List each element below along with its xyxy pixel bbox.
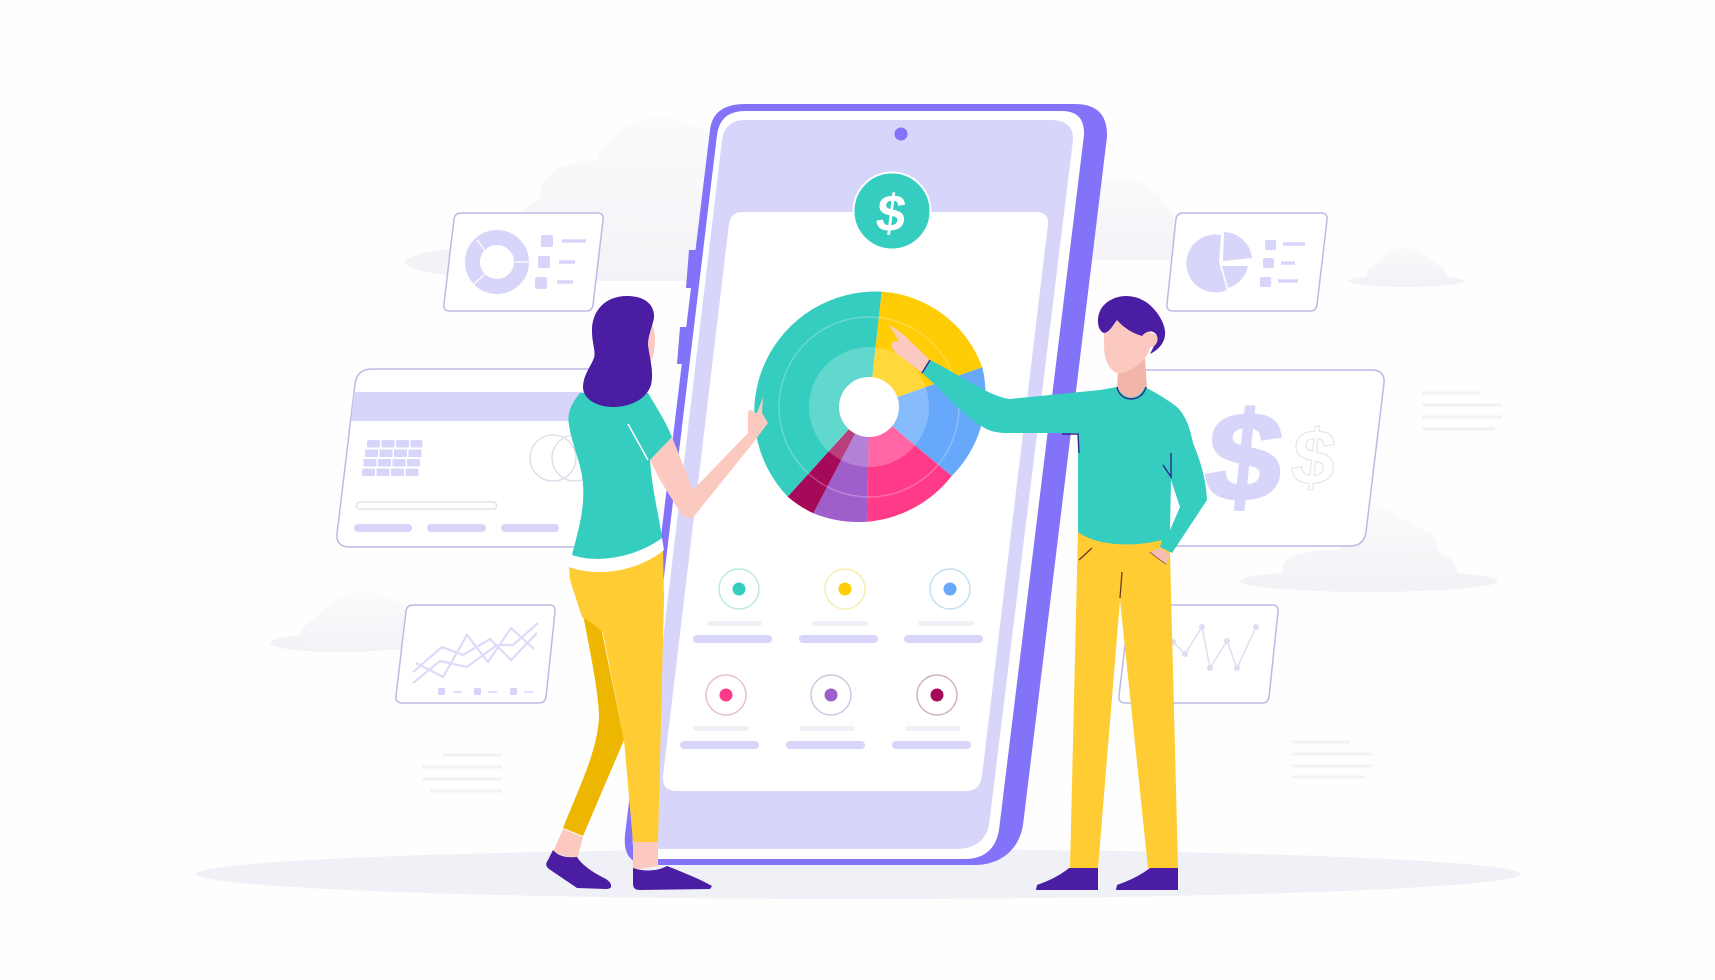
legend: pie chart: [1260, 240, 1305, 287]
panel: dollar signs card: [1130, 370, 1384, 546]
cloud: large left behind phone: [405, 116, 760, 281]
card stripe: [351, 392, 600, 421]
slice: blue: [869, 367, 986, 476]
woman ankles: [553, 829, 658, 870]
panel: donut chart card: [444, 213, 603, 311]
woman hair: [583, 296, 654, 407]
legend item: maroon: [892, 675, 971, 749]
card number field: [356, 502, 496, 509]
outer thin ring: [779, 317, 959, 497]
cloud: lower left: [270, 592, 430, 652]
phone body: [625, 104, 1107, 865]
ground shadow: [196, 849, 1520, 899]
man neck: [1117, 358, 1147, 398]
app card: [663, 212, 1048, 791]
man trousers: [1070, 530, 1178, 868]
line chart: left: [413, 623, 538, 683]
pie chart: sunburst: [754, 292, 986, 522]
man sweater: [922, 360, 1207, 553]
phone bezel: [633, 111, 1084, 859]
icon: dollar badge: $: [873, 185, 909, 243]
placeholder text lines: upper right: [1422, 393, 1502, 429]
woman arm and hand: [650, 397, 768, 518]
legend item: teal: [693, 569, 772, 643]
icon: card chip: [362, 440, 422, 476]
placeholder text lines: lower right: [1292, 742, 1372, 777]
icon: dollar badge: [854, 172, 930, 250]
panel: left line chart card: [396, 605, 555, 703]
cloud: top right small: [1348, 247, 1464, 287]
slice: yellow: [869, 292, 982, 407]
phone camera: [894, 128, 908, 140]
card detail bars: [354, 524, 559, 532]
legend item: yellow: [799, 569, 878, 643]
slice: purple: [813, 407, 869, 522]
legend: left line chart: [438, 688, 533, 695]
center hole: [839, 377, 899, 437]
woman waist gap: [569, 538, 664, 572]
woman sleeve seam: [628, 424, 648, 460]
cloud: right behind phone: [1090, 177, 1182, 260]
slice: teal: [754, 292, 882, 497]
man shoes: [1036, 868, 1178, 890]
line chart: right: [1150, 624, 1259, 671]
woman back leg: [563, 610, 624, 836]
woman front leg and hips: [569, 549, 664, 842]
woman shoes: [546, 850, 712, 890]
legend item: pink: [680, 675, 759, 749]
phone: [625, 104, 1107, 865]
man arm gap: [1170, 480, 1180, 530]
man hand in pocket: [1150, 548, 1170, 564]
panel: right line chart card: [1119, 605, 1278, 703]
man: [889, 296, 1207, 890]
icon: card brand circles: [530, 435, 598, 481]
cloud: lower right: [1240, 507, 1498, 592]
icon: donut chart: [472, 238, 530, 286]
man ear: [1144, 333, 1158, 347]
panel: pie chart card: [1167, 213, 1327, 311]
slice: maroon: [788, 407, 869, 513]
man sweater details: [922, 360, 1171, 477]
man pointing hand: [889, 325, 930, 373]
man hair: [1098, 296, 1165, 354]
icon: outlined dollar sign: $: [1288, 413, 1340, 501]
man face: [1104, 318, 1150, 374]
legend item: purple: [786, 675, 865, 749]
woman face: [645, 320, 655, 362]
phone side buttons: [677, 250, 699, 364]
slice: pink: [867, 407, 952, 522]
woman shirt: [568, 393, 672, 559]
placeholder text lines: lower left: [422, 755, 502, 791]
man trouser seams: [1079, 548, 1166, 598]
legend item: blue: [904, 569, 983, 643]
woman: [546, 296, 768, 890]
inner light ring: [809, 347, 929, 467]
phone screen: [640, 120, 1073, 849]
legend: donut chart: [535, 235, 586, 289]
panel: credit card: [337, 369, 620, 547]
icon: large dollar sign: $: [1200, 387, 1290, 527]
icon: pie chart: [1186, 232, 1252, 292]
